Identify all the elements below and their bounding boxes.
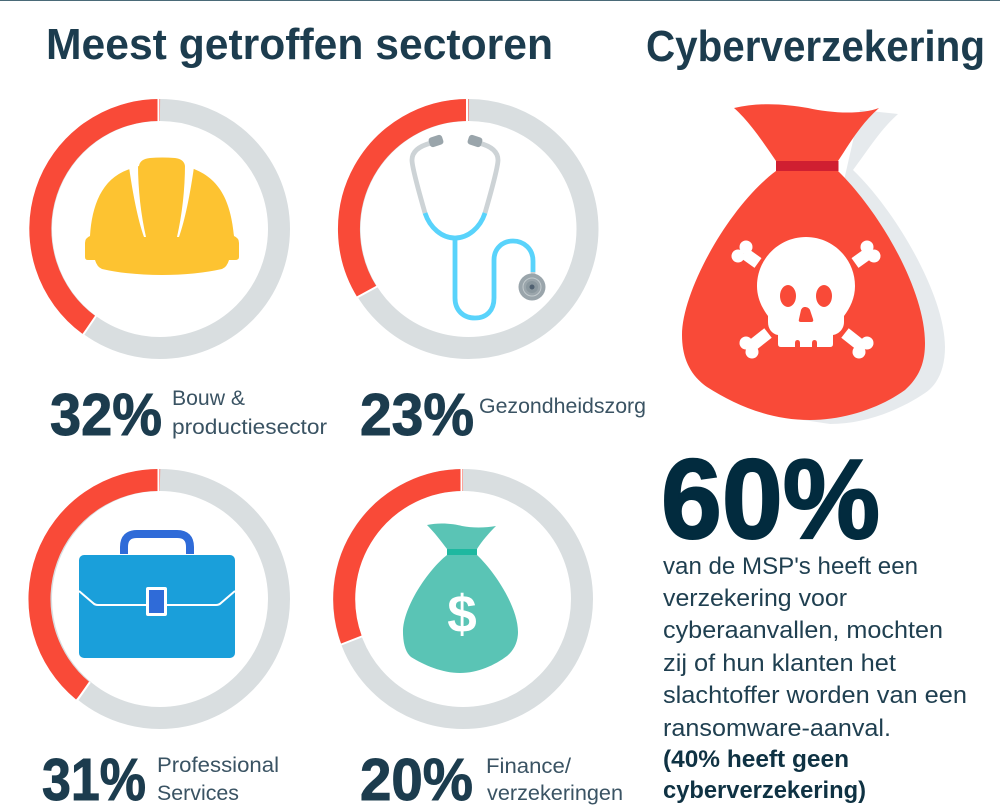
- label: Professional Services: [157, 754, 279, 805]
- label: Finance/ verzekeringen: verzekeringen: [487, 782, 623, 805]
- label: Gezondheidszorg: Gezondheidszorg: [479, 395, 646, 418]
- text block: description: cyberverzekering): [663, 777, 866, 804]
- label: Bouw & productiesector: productiesector: [172, 416, 327, 439]
- heading: Meest getroffen sectoren: Meest getroffen sectoren: [46, 20, 553, 69]
- label: Bouw & productiesector: Bouw &: [172, 387, 245, 410]
- text block: description: cyberaanvallen, mochten: [663, 617, 943, 644]
- donut chart: 32%: [40, 98, 279, 348]
- donut chart: 31%: [39, 468, 279, 718]
- panel: bouw en productiesector: [40, 98, 327, 448]
- donut chart: 23%: [349, 98, 588, 348]
- label: Finance/ verzekeringen: [486, 755, 623, 805]
- text block: description: van de MSP's heeft een: [663, 553, 918, 580]
- label: Bouw & productiesector: [172, 387, 327, 439]
- label: Professional Services: Services: [157, 782, 239, 805]
- stat: 60%: 60%: [661, 436, 880, 562]
- text block: description: zij of hun klanten het: [663, 650, 896, 677]
- icon: stethoscope: [412, 134, 546, 318]
- stat: 31%: 31%: [42, 747, 146, 812]
- text block: description: (40% heeft geen: [663, 746, 849, 773]
- icon: money bag: [403, 523, 518, 673]
- text block: description: slachtoffer worden van een: [663, 682, 967, 709]
- text block: description: verzekering voor: [663, 585, 847, 612]
- stat: 23%: 23%: [360, 382, 474, 448]
- label: Professional Services: Professional: [157, 754, 279, 777]
- panel: finance en verzekeringen: [340, 468, 623, 812]
- icon: briefcase: [79, 534, 235, 658]
- donut chart: 20%: [340, 468, 582, 718]
- text block: description: ransomware-aanval.: [663, 715, 891, 742]
- panel: professional services: [39, 468, 279, 812]
- text block: description: [663, 553, 967, 804]
- label: Finance/ verzekeringen: Finance/: [486, 755, 571, 778]
- icon: hard hat: [85, 158, 239, 275]
- crossbones: [732, 240, 880, 358]
- panel: gezondheidszorg: [349, 98, 646, 448]
- skull: [757, 237, 855, 347]
- panel: cyberverzekering: [661, 104, 967, 804]
- stat: 32%: 32%: [50, 382, 162, 448]
- dollar sign: $: [447, 585, 477, 644]
- icon: ransom bag with skull: [682, 104, 945, 424]
- stat: 20%: 20%: [360, 747, 473, 812]
